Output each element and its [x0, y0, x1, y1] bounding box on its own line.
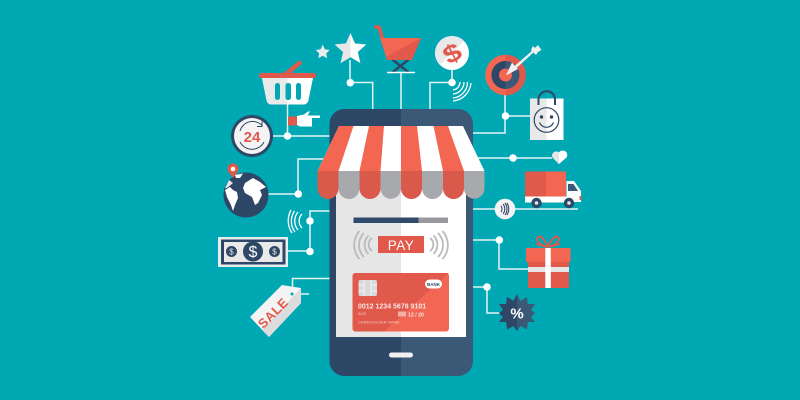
icon: dollar bill: $: [249, 244, 258, 261]
progress bar: [354, 218, 448, 223]
phone screen shaded half: [336, 180, 401, 337]
contactless waves right: [430, 231, 448, 259]
icon: big star: [335, 33, 366, 63]
card chip: [358, 280, 377, 296]
awning scallops: [318, 171, 484, 199]
card small code: 0123: [358, 312, 366, 316]
icon: 24 hour clock: 24: [244, 129, 261, 146]
truck chassis: [525, 196, 567, 202]
cart handle: [376, 27, 383, 40]
icon: smiley shopping bag: [530, 91, 564, 140]
gift ribbon: [545, 248, 551, 288]
truck cab: [566, 181, 581, 202]
card expiry: 12 / 20: [408, 312, 424, 318]
phone screen: [336, 180, 466, 337]
icon: dollar coin: $: [438, 36, 467, 70]
connector nodes: [284, 79, 517, 291]
icon: 24 hour clock: [231, 115, 273, 157]
basket slots: [275, 83, 301, 100]
icon: small star: [316, 45, 330, 58]
card body: [352, 273, 449, 332]
pay button: [378, 236, 424, 253]
basket body: [262, 78, 313, 105]
card number: 0012 1234 5678 9101: [358, 304, 426, 310]
icon: dollar bill: $: [272, 248, 277, 256]
cart basket: [380, 38, 421, 60]
icon: contactless badge: [495, 199, 515, 219]
icon: heart: [552, 150, 567, 164]
cart stand: [393, 60, 408, 72]
icon: pointing hand: [288, 112, 320, 126]
icon: gift box: [526, 237, 570, 288]
icon: percent badge: [499, 294, 535, 331]
phone: [318, 109, 484, 376]
gift bow: [536, 237, 560, 247]
cardholder name: CARDHOLDER NAME: [358, 320, 400, 324]
icon: shopping cart: [376, 27, 421, 72]
gift band: [528, 267, 569, 272]
contactless waves left: [354, 231, 372, 259]
truck wheels: [531, 198, 574, 208]
arrow: [506, 45, 542, 76]
icon: delivery truck: [525, 172, 581, 208]
icon: wireless waves top: [453, 82, 471, 101]
connector lines: [268, 60, 578, 313]
awning: [318, 126, 484, 199]
truck box: [525, 172, 566, 196]
pay button: PAY: [388, 238, 414, 253]
awning white panel: [318, 126, 484, 171]
location pin: [228, 163, 238, 178]
icon: sale tag: SALE: [255, 295, 291, 331]
awning red stripes: [318, 126, 464, 171]
gift lid: [526, 248, 570, 262]
icon: shopping basket: [259, 63, 316, 105]
bank badge: BANK: [427, 282, 441, 287]
basket rim: [259, 73, 316, 78]
cart base: [387, 72, 415, 74]
icon: target with arrow: [485, 45, 542, 95]
icon: sale tag: [250, 285, 301, 337]
gift body: [528, 262, 569, 288]
card shaded diagonal: [352, 273, 449, 332]
icon: dollar bill: $: [229, 248, 234, 256]
phone body shaded half: [330, 109, 401, 376]
phone body: [330, 109, 473, 376]
icon: globe with pin: [224, 163, 268, 218]
icon: percent badge: %: [510, 306, 524, 322]
basket handle: [286, 63, 300, 74]
continents: [225, 174, 266, 211]
home button: [389, 352, 413, 358]
icon: wireless waves left: [288, 210, 302, 233]
credit card: [352, 273, 449, 332]
icon: dollar bill: [218, 237, 288, 267]
